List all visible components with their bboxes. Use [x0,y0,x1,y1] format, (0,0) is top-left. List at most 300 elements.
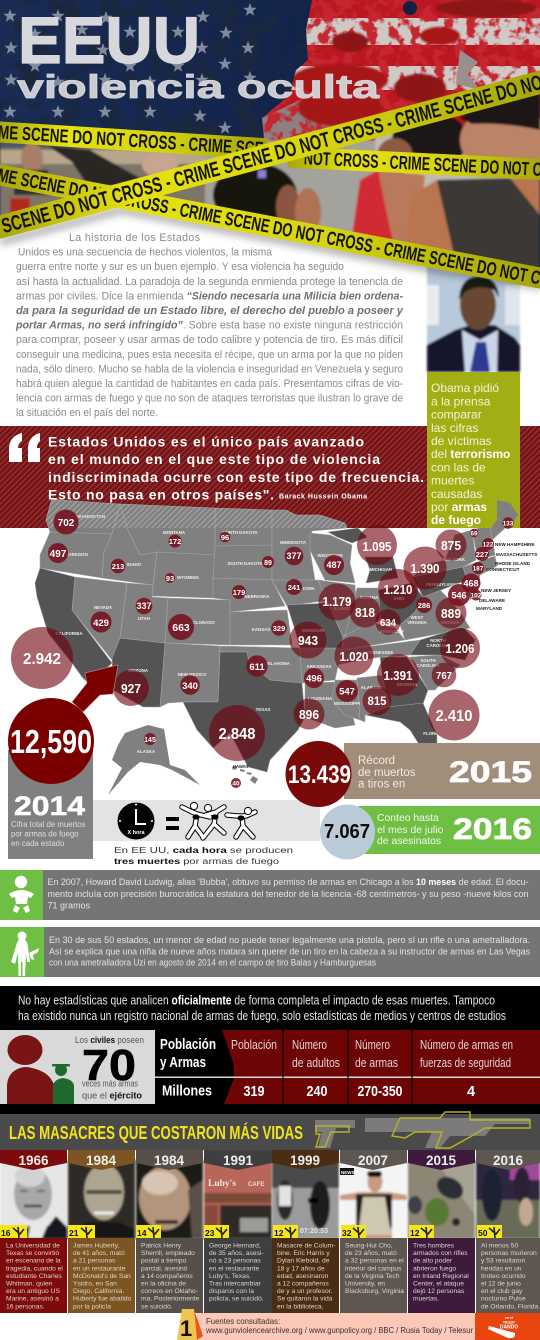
photos strip [0,94,540,268]
panel: 2016 count [320,804,540,860]
circle values: 611 [249,662,265,673]
table: fuerzas de seguridad [420,1056,511,1070]
olive obama panel: Obama pidió [431,381,499,395]
state labels: MARYLAND [476,606,503,611]
column 1984 huberty: 21 [69,1228,79,1238]
record caption: a tiros en [358,778,405,790]
state labels: IOWA [303,586,316,591]
caption: tres muertes por armas de fuego [114,856,257,866]
record number: 13.439 [288,761,351,789]
crime scene tapes: ME SCENE DO NOT CROSS - CRIME SCE [0,122,264,160]
column 2015: abrieron fuego [413,1265,456,1272]
count caption: el mes de julio [377,825,444,836]
logo box: en el [505,1316,513,1320]
count circle [320,804,375,860]
column 2015: de alto poder [413,1258,453,1265]
column 1999: Se quitaron la vida [277,1296,333,1303]
column 1984 sherrill: 1984 [154,1153,185,1168]
state labels: VIRGINIA [407,620,428,625]
column 1991: Luby's [208,1179,236,1189]
column 2007 [340,1150,407,1313]
caption: En EE UU, cada hora se producen [114,845,276,855]
icon: civilian [7,1067,54,1104]
circle values: 468 [463,578,479,588]
panel: menor de edad [0,927,540,977]
quote text: Esto no pasa en otros países". [48,487,274,503]
olive obama panel: las cifras [431,421,478,435]
state labels: TEXAS [256,707,270,712]
state labels: MASSACHUSETTS [496,552,537,557]
intro text block: guerra entre norte y sur es un buen ejemplo. Y esa violencia ha seguido [16,261,344,273]
hawaii [232,766,258,784]
icon: clock: X hora [127,830,145,836]
panel: civiles vs army: 70 [82,1041,136,1090]
column 1984 huberty: de 41 años, mató [73,1250,125,1257]
intro text block: portar Armas, no será infringido”. Sobre esta base no existe ninguna restricción [15,320,403,332]
circle values: 227 [476,550,488,559]
column 1991: en el restaurante [209,1265,259,1272]
state labels: VIRGINIA [440,620,461,625]
column 1991: 23 [205,1228,215,1238]
circle values: 172 [169,537,181,546]
circle values: 93 [166,574,174,583]
circle values: 818 [355,605,375,620]
column 2015 [408,1150,475,1313]
column 1984 huberty: Ysidro, en San [73,1280,117,1288]
circle values: 943 [298,633,318,648]
intro text block: para comprar, poseer y usar armas de todo calibre y potencia de tiro. Es más difícil [16,334,403,346]
intro text block: da para la seguridad de un Estado libre, el derecho del pueblo a poseer y [16,305,404,317]
column 1984 sherrill: en la oficina de [141,1280,186,1288]
circle values: 546 [451,590,467,600]
state labels: FLORIDA [423,731,444,736]
state labels: UTAH [138,616,150,621]
state labels: NEW MEXICO [178,672,207,677]
circle values: 2.848 [218,726,256,743]
column 1991 [204,1150,272,1313]
table: 4 [467,1084,475,1100]
olive obama panel [427,372,520,528]
state labels: IDAHO [127,562,142,567]
circle values: 875 [441,538,461,553]
table: Número [292,1038,327,1052]
state labels: NORTH DAKOTA [222,530,258,535]
text: Así se explica que una niña de nueve años matara sin querer de un tiro en la cabeza a su instructor de armas en Las Vegas [49,946,530,956]
olive obama panel: con las de [431,460,486,474]
logo box: DANDO [500,1324,518,1330]
state labels: MAINE [496,515,510,520]
caption: en cada estado [11,839,65,848]
state labels: CAROLINA [416,663,440,668]
column 1991: de 35 años, asesi- [209,1250,264,1257]
state labels: ARIZONA [128,668,149,673]
table: Millones [162,1084,212,1100]
arrow [72,665,118,712]
column 1991: Luby's, Texas. [209,1273,251,1280]
text: Los civiles poseen [75,1035,144,1046]
table [155,1030,540,1104]
lead text: No hay estadísticas que analicen oficialmente de forma completa el impacto de esas muertes. Tampoco [18,994,540,1008]
state labels: PENNSYLVANIA [426,582,461,587]
column 2015: Center, el ataque [413,1280,464,1288]
column 2016: Al menos 50 [481,1242,518,1250]
intro text block: armas por civiles. Dice la enmienda “Siendo necesaria una Milicia bien ordena- [16,290,403,302]
icon: guns silhouette [315,1118,530,1148]
state labels: VERMONT [454,527,476,532]
panel: bubba [0,870,540,920]
column 1984 huberty: por la policía [73,1303,111,1310]
column 1984 sherrill: ma. Posteriormente [141,1296,200,1303]
state labels: MONTANA [163,530,186,535]
circle values: 102 [471,592,482,600]
text: con una ametralladora Uzi en agosto de 2014 en el campo de tiro Balas y Hamburguesas [49,958,376,968]
circle values: 487 [326,560,342,570]
count number: 7.067 [324,821,370,843]
quote band [0,426,540,528]
circle values: 2.942 [23,651,61,668]
column 2015: dejó 12 personas [413,1288,465,1295]
column 2015: muertas. [413,1296,439,1303]
column 1984 huberty: Diego, California. [73,1288,124,1295]
column 1966: Marine, asesinó a [6,1296,59,1303]
state labels: HAWAII [233,764,248,769]
circle values: 145 [144,737,156,744]
title: EEUU [18,3,200,77]
column 1999: 07:20:53 [300,1228,328,1235]
sources text: www.gunviolencearchive.org / www.gunpolicy.org / BBC / Rusia Today / Telesur [205,1326,473,1335]
state labels: ARKANSAS [307,664,332,669]
state labels: CONNECTICUT [486,567,520,572]
circle values: 187 [473,566,484,572]
state labels: NEW JERSEY [481,588,511,593]
olive obama panel: de víctimas [431,434,492,448]
column 1966: estudiante Charles [6,1273,62,1280]
marker number [177,1309,197,1340]
column 1991: George Hennard, [209,1242,261,1250]
column 1984 huberty: en un restaurante [73,1265,126,1272]
section heading band [0,1112,540,1150]
column 1984 huberty: Huberty fue abatido [73,1296,132,1303]
column 1999: 12 [274,1228,284,1238]
table: Población [231,1038,277,1052]
state labels: MICHIGAN [370,567,392,572]
intro text block [15,232,404,419]
column 1966: La Universidad de [6,1242,60,1250]
column 1999 [272,1150,339,1313]
panel: 2014 total [8,665,118,859]
olive obama panel: del terrorismo [431,447,510,461]
circle values: 496 [306,674,322,684]
column 1984 sherrill: parcial, asesinó [141,1265,188,1272]
header: flag and photos [0,0,540,290]
intro text block: así hasta la actualidad. La paradoja de la segunda enmienda protege la tenencia de [16,276,403,288]
quote text: Estados Unidos es el único país avanzado [48,434,364,450]
column 1966: era un antiguo US [6,1288,60,1295]
table: Población [160,1037,216,1053]
record caption: de muertos [358,767,416,779]
count caption: de asesinatos [377,836,441,847]
icon: girl [11,937,39,976]
olive obama panel: causadas [431,487,482,501]
state labels: DELAWARE [479,598,505,603]
table: Número de armas en [420,1038,513,1052]
circle values: 547 [339,686,355,698]
sources footer [177,1309,475,1340]
circle values: 377 [286,551,302,561]
column 2007: de la Virginia Tech [345,1273,400,1280]
column 1984 sherrill: postal a tiempo [141,1258,187,1265]
intro text block: Unidos es una secuencia de hechos violentos, la misma [18,247,272,259]
circle values: 1.020 [340,649,368,664]
state labels: MISSOURI [302,628,324,633]
obama photo [427,262,520,372]
column 1984 sherrill: se suicidó. [141,1303,173,1310]
column 2007: Blacksburg, Virginia [345,1288,404,1295]
column 2007: de 23 años, mató [345,1250,397,1257]
state labels: CAROLINA [426,643,450,648]
header shadow [0,206,540,290]
circle values: 1.210 [384,582,412,597]
intro text block: lencia con armas de fuego y que no son de ataques terroristas que ilustran lo grave de [16,393,403,405]
column 2007: interior del campus [345,1265,402,1272]
state labels: WASHINGTON [75,514,105,519]
table: 240 [306,1084,328,1100]
column 2016: 50 [478,1228,488,1238]
circle values: 96 [221,533,229,542]
subtitle: violencia oculta [17,68,380,105]
column 1984 sherrill: Patrick Henry [141,1242,182,1250]
big circle [8,698,94,784]
state labels: ILLINOIS [334,606,352,611]
column 1984 sherrill [136,1150,203,1313]
column 1984 huberty: James Huberty, [73,1242,119,1250]
intro text block: nada, sólo dinero. Mucho se habla de la violencia e inseguridad en Venezuela y seguro [16,363,403,375]
column 1999: 18 y 17 años de [277,1265,325,1272]
state labels: SOUTH [420,658,436,663]
state labels: COLORADO [189,620,215,625]
table: y Armas [160,1055,206,1071]
state labels: CALIFORNIA [55,631,83,636]
column 1999: en la biblioteca. [277,1303,324,1310]
circle values: 1.391 [384,668,412,683]
text: En 30 de sus 50 estados, un menor de edad no puede tener legalmente una pistola, pero sí un rifle o una ametralladora. [49,935,530,945]
quote text: en el mundo en el que este tipo de violencia [48,451,380,467]
equals sign [166,817,179,830]
state labels: INDIANA [360,595,379,600]
state labels: NEW YORK [441,557,466,562]
column 1984 sherrill: 14 [137,1228,147,1238]
column 1966: Whitman, quien [6,1280,53,1288]
olive obama panel: muertes [431,474,474,488]
column 1991: 1991 [223,1153,254,1168]
column 1966: 16 [1,1228,11,1238]
band texture over map [46,498,347,528]
column 1991: policía, se suicidó. [209,1296,264,1303]
circle values: 122 [483,542,494,548]
column 1966 [0,1150,67,1313]
state labels: MINNESOTA [280,540,307,545]
column 1984 sherrill: Sherrill, empleado [141,1250,195,1257]
column 2007: 32 [342,1228,352,1238]
column 2016: y 53 resultaron [481,1258,526,1265]
circle values: 1.179 [322,594,352,609]
panel: civiles vs army: veces más armas [82,1078,138,1090]
table: 270-350 [358,1084,402,1100]
state labels: NEBRASKA [245,594,270,599]
state labels: OREGON [68,552,88,557]
panel: 2015 record [286,741,540,807]
circle values: 337 [136,601,152,611]
icon: baby [9,890,34,913]
circle values [23,518,514,788]
circle values: 497 [50,549,67,560]
circle values: 1.390 [410,561,440,576]
column 2007: University, en [345,1280,385,1288]
column 1999: Dylan Klebold, de [277,1258,330,1265]
circle values: 1.206 [446,641,474,656]
column 1966: en escenario de la [6,1258,61,1265]
state labels: ALABAMA [361,685,384,690]
circle values: 815 [368,694,387,708]
column 1999: bine. Eric Harris y [277,1250,330,1257]
column 2016: de Orlando, Florida. [481,1303,540,1310]
quote text: Barack Hussein Obama [279,494,367,500]
column 1999: de y a un profesor. [277,1288,333,1295]
heading: LAS MASACRES QUE COSTARON MÁS VIDAS [9,1122,303,1143]
us map [35,498,537,795]
logo box [475,1313,540,1340]
column 2015: 2015 [426,1153,457,1168]
column 1999: a 12 compañeros [277,1280,329,1288]
circle values: 179 [233,588,245,597]
circle values: 69 [470,530,478,538]
circle values: 133 [503,520,514,528]
circle values: 340 [182,681,198,692]
count caption: Conteo hasta [377,813,439,824]
table: 319 [244,1084,264,1100]
column 2016: nocturno Pulse [481,1296,526,1303]
column 1991: disparos con la [209,1288,254,1295]
column 1984 sherrill: a 14 compañeros [141,1273,193,1280]
state labels: WEST [411,615,424,620]
column 2007: 2007 [358,1153,388,1168]
state labels: GEORGIA [397,682,418,687]
circle values: 89 [264,560,272,567]
circle values: 702 [58,518,75,529]
year: 2014 [14,791,85,821]
state labels: RHODE ISLAND [495,561,531,566]
massacre columns [0,1150,540,1313]
icon: soldier [52,1064,74,1104]
text: mento incluía con precisión burocrática la estatura del tenedor de la licencia -68 centímetros- y su peso -nueve kilos con [48,889,528,899]
column 1991: Tras intercambiar [209,1280,262,1288]
circle values: 2.410 [436,708,473,725]
state labels: NEW HAMPSHIRE [495,542,535,547]
intro text block: La historia de los Estados [69,232,200,244]
state labels: NORTH [430,638,446,643]
table: Número [355,1038,390,1052]
circle values: 1.095 [362,539,392,554]
table: de adultos [292,1056,340,1070]
title [17,3,380,105]
record circle [286,741,352,807]
state labels: WISCONSIN [317,553,343,558]
column 1999: Masacre de Colum- [277,1242,335,1250]
big number: 12,590 [10,723,92,760]
column 2016: heridas en un [481,1265,522,1272]
intro text block: habrá quien alegue la cantidad de habitantes en cada país. Presentamos cifras de vio- [16,378,403,390]
state labels: LOUISIANA [308,696,333,701]
year: 2015 [449,756,532,789]
circle values: 213 [112,562,124,571]
state labels: OKLAHOMA [264,661,291,666]
state labels: OHIO [393,596,405,601]
year: 2016 [453,813,532,846]
column 2016: en el club gay [481,1288,523,1295]
column 2007: a 32 personas en el [345,1258,404,1265]
column 1984 huberty: a 21 personas [73,1258,116,1265]
column 1991: nó a 23 personas [209,1258,261,1265]
column 2015: Tres hombres [413,1242,455,1250]
column 1999: edad, asesinaron [277,1273,329,1280]
intro text block: conseguir una medicina, pues esta necesita el récipe, que un arma por la que no piden [16,349,403,361]
circle values: 889 [441,606,461,621]
state labels: SOUTH DAKOTA [227,561,263,566]
circle values: 329 [273,624,285,633]
column 1999: 1999 [290,1153,320,1168]
column 1966: tragedia, cuando el [6,1265,63,1272]
logo box: mazo [503,1320,515,1324]
panel: civiles vs army: que el ejército [82,1090,142,1102]
crime scene tapes [0,68,540,291]
column 2007: NEWS [341,1170,354,1175]
quote mark [9,433,40,462]
caption: Cifra total de muertos [11,820,86,829]
olive obama panel: a la prensa [431,394,491,408]
column 1984 huberty: 1984 [86,1153,117,1168]
column 2016: el 12 de junio [481,1280,521,1288]
alaska [108,725,200,795]
column 1966: 1966 [18,1153,49,1168]
column 1966: 16 personas. [6,1303,45,1310]
column 1984 huberty: McDonald's de San [73,1273,131,1280]
map data circles [11,510,514,788]
circle values: 40 [232,780,240,788]
circle values: 896 [299,707,319,722]
icon: clock [118,802,154,840]
state labels: KANSAS [252,627,270,632]
column 2016 [476,1150,540,1313]
caption: por armas de fuego [11,830,79,838]
state labels: WYOMING [177,575,200,580]
circle values: 634 [380,618,396,629]
state labels [55,514,537,769]
column 2007: Seung-Hui Cho, [345,1242,393,1250]
state labels: KENTUCKY [380,629,404,634]
olive obama panel: de fuego [431,513,481,527]
column 2015: en Inland Regional [413,1273,469,1280]
panel: civiles vs army [0,1030,155,1104]
panel: hourly deaths [93,800,320,866]
circle values: 241 [288,583,300,592]
sources text: Fuentes consultadas: [206,1317,280,1326]
icon: guns outline [316,1112,530,1148]
state labels: TENNESSEE [367,650,393,655]
text: En 2007, Howard David Ludwig, alias 'Bubba', obtuvo su permiso de armas en Chicago a los 10 meses de edad. El docu- [48,877,529,887]
quote text: indiscriminada ocurre con este tipo de frecuencia. [48,469,424,485]
state labels: MISSISSIPPI [334,701,360,706]
icon: chalk outlines [182,802,255,838]
